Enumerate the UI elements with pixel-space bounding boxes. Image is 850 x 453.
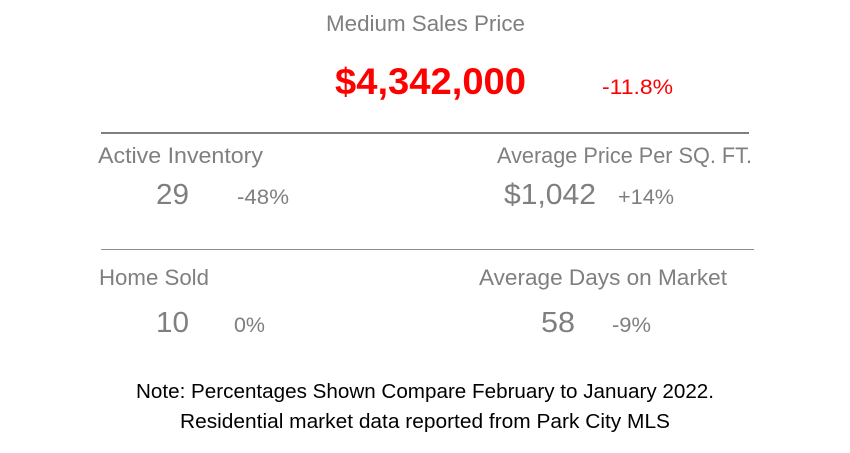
value: $1,042: $1,042 [504, 179, 596, 211]
note line 1: Note: Percentages Shown Compare February to January 2022. [136, 381, 714, 403]
change: -9%: -9% [612, 314, 651, 337]
change: -48%: -48% [237, 186, 289, 209]
value: 29: 29 [156, 179, 189, 211]
change: +14%: +14% [618, 186, 674, 209]
label: Active Inventory: Active Inventory [98, 143, 263, 168]
label: Home Sold: Home Sold [99, 265, 209, 290]
main price figure: $4,342,000 [335, 61, 526, 102]
value: 10: 10 [156, 307, 189, 339]
panel: average days on market [479, 265, 727, 339]
note line 2: Residential market data reported from Park City MLS [180, 411, 670, 433]
label: Average Price Per SQ. FT.: Average Price Per SQ. FT. [497, 143, 752, 168]
panel: home sold [99, 265, 265, 339]
change: 0%: 0% [234, 314, 265, 337]
value: 58: 58 [541, 307, 575, 339]
main price change: -11.8% [602, 76, 673, 99]
panel: average price per square foot [497, 143, 752, 211]
label: Average Days on Market: Average Days on Market [479, 265, 727, 290]
footnote [136, 381, 714, 433]
heading: Medium Sales Price: Medium Sales Price [326, 11, 525, 36]
panel: active inventory [98, 143, 289, 211]
